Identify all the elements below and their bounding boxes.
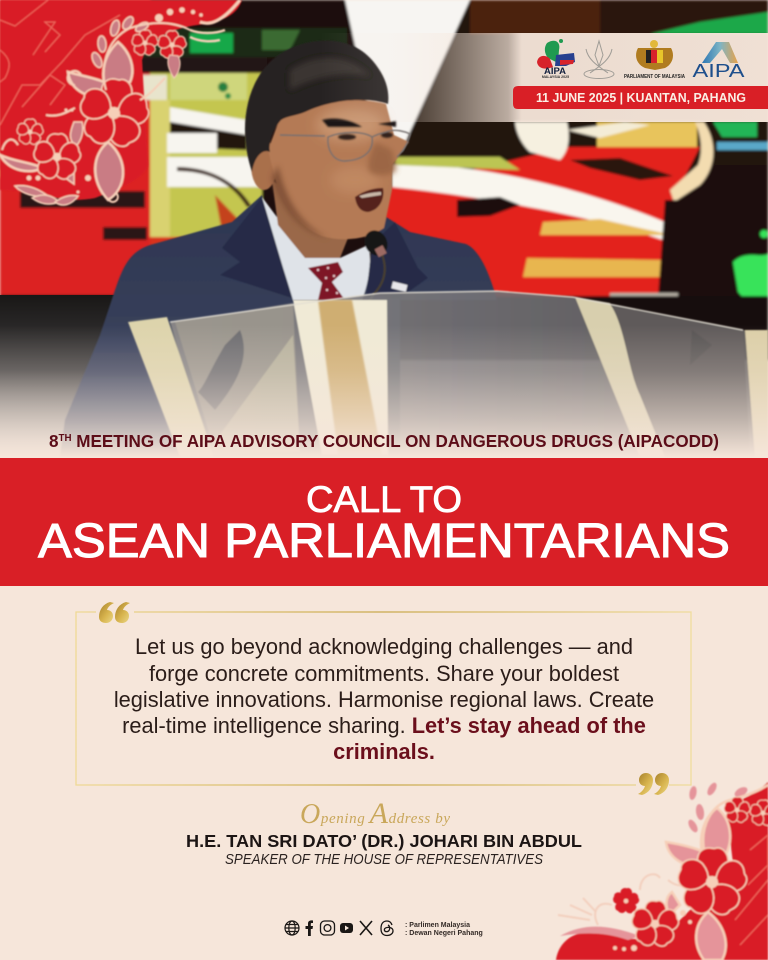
icon: X: [360, 921, 372, 935]
icon: instagram: [320, 921, 334, 935]
speaker: [60, 40, 497, 457]
pale flourishes: [558, 874, 695, 925]
logo: AIPA: AIPA: [692, 61, 744, 81]
nose: [368, 142, 396, 175]
quote text: forge concrete commitments. Share your boldest: [149, 661, 619, 686]
microphone: [320, 226, 392, 372]
tie: [308, 262, 345, 300]
head: [268, 100, 409, 239]
icon: facebook: [306, 920, 313, 936]
tie through glass: [318, 300, 382, 455]
suit jacket: [60, 195, 497, 457]
speaker name: H.E. TAN SRI DATO’ (DR.) JOHARI BIN ABDUL: [186, 831, 582, 851]
background photo: LED screen: [0, 0, 768, 360]
red title banner: [0, 458, 768, 586]
quote panel: [76, 602, 691, 795]
quote text: real-time intelligence sharing. Let’s stay ahead of the: [122, 713, 646, 738]
upper flowers: [723, 797, 751, 824]
leaves: [666, 808, 730, 960]
bottom fade into cream: [0, 325, 768, 458]
icon: threads: [381, 921, 393, 936]
opening quote mark: [99, 602, 130, 623]
glass panel: [170, 291, 768, 460]
social handles: : Dewan Negeri Pahang: [405, 930, 483, 937]
cream left strip: [128, 317, 214, 457]
large flower: [675, 848, 750, 919]
small flower: [16, 119, 44, 146]
subtitle: MEETING OF AIPA ADVISORY COUNCIL ON DANGEROUS DRUGS (AIPACODD): [72, 431, 719, 451]
floral corner: bottom right: [556, 781, 768, 960]
icon: globe: [285, 921, 299, 935]
lectern glass: [128, 291, 768, 460]
icon: youtube: [340, 923, 353, 933]
pin: [391, 281, 407, 292]
floor gradient behind speaker: [0, 295, 140, 460]
cream centre-right strip: [575, 297, 665, 457]
subtitle: TH: [59, 433, 72, 444]
date pill: [513, 86, 768, 109]
header band with logos: [320, 33, 768, 122]
far-right cream strip: [745, 330, 768, 457]
logo: Parliament of Malaysia crest: PARLIAMENT OF MALAYSIA: [624, 74, 685, 80]
logo: Malaysian emblem with keris: [584, 41, 614, 78]
social handles: [405, 922, 483, 937]
social icons row: [285, 920, 483, 937]
subtitle: 8: [49, 431, 59, 451]
quote text: [114, 634, 654, 764]
glasses: [280, 130, 410, 161]
face shading: [272, 165, 328, 238]
shirt collar: [262, 197, 370, 300]
ear: [251, 140, 277, 190]
large flower: [74, 76, 154, 153]
medium flower: [630, 901, 681, 949]
mouth: [355, 188, 383, 212]
neck: [272, 180, 348, 258]
hair: [245, 40, 388, 172]
reflected suit area: [175, 303, 300, 452]
floral corner: top left: [0, 0, 242, 205]
speaker role: SPEAKER OF THE HOUSE OF REPRESENTATIVES: [225, 852, 543, 868]
shirt through glass: [293, 300, 388, 455]
leaves: [0, 42, 132, 200]
title line 2: ASEAN PARLIAMENTARIANS: [38, 514, 730, 568]
quote text: legislative innovations. Harmonise regional laws. Create: [114, 687, 654, 712]
frame: [76, 612, 691, 785]
date pill: 11 JUNE 2025 | KUANTAN, PAHANG: [536, 90, 746, 105]
title line 1: CALL TO: [306, 479, 462, 520]
quote text: criminals.: [333, 739, 435, 764]
logo: AIPA Malaysia 2025: AIPA: [544, 66, 566, 77]
opening address script: Opening Address by: [300, 797, 450, 830]
logo: AIPA Malaysia 2025: [537, 39, 575, 79]
medium flower: [32, 134, 83, 182]
dark grey glass right: [610, 304, 750, 457]
small flower: [612, 888, 640, 915]
eyebrows and eyes: [322, 118, 396, 140]
quote text: Let us go beyond acknowledging challenges — and: [135, 634, 633, 659]
closing quote mark: [638, 773, 669, 795]
attribution: [186, 797, 582, 868]
social handles: : Parlimen Malaysia: [405, 922, 470, 929]
logo: Parliament of Malaysia crest: [624, 40, 685, 80]
logo: AIPA: [692, 42, 744, 81]
logo: AIPA Malaysia 2025: MALAYSIA 2025: [542, 75, 569, 79]
upper flowers: [156, 31, 188, 61]
lapel shadow: [220, 197, 292, 298]
